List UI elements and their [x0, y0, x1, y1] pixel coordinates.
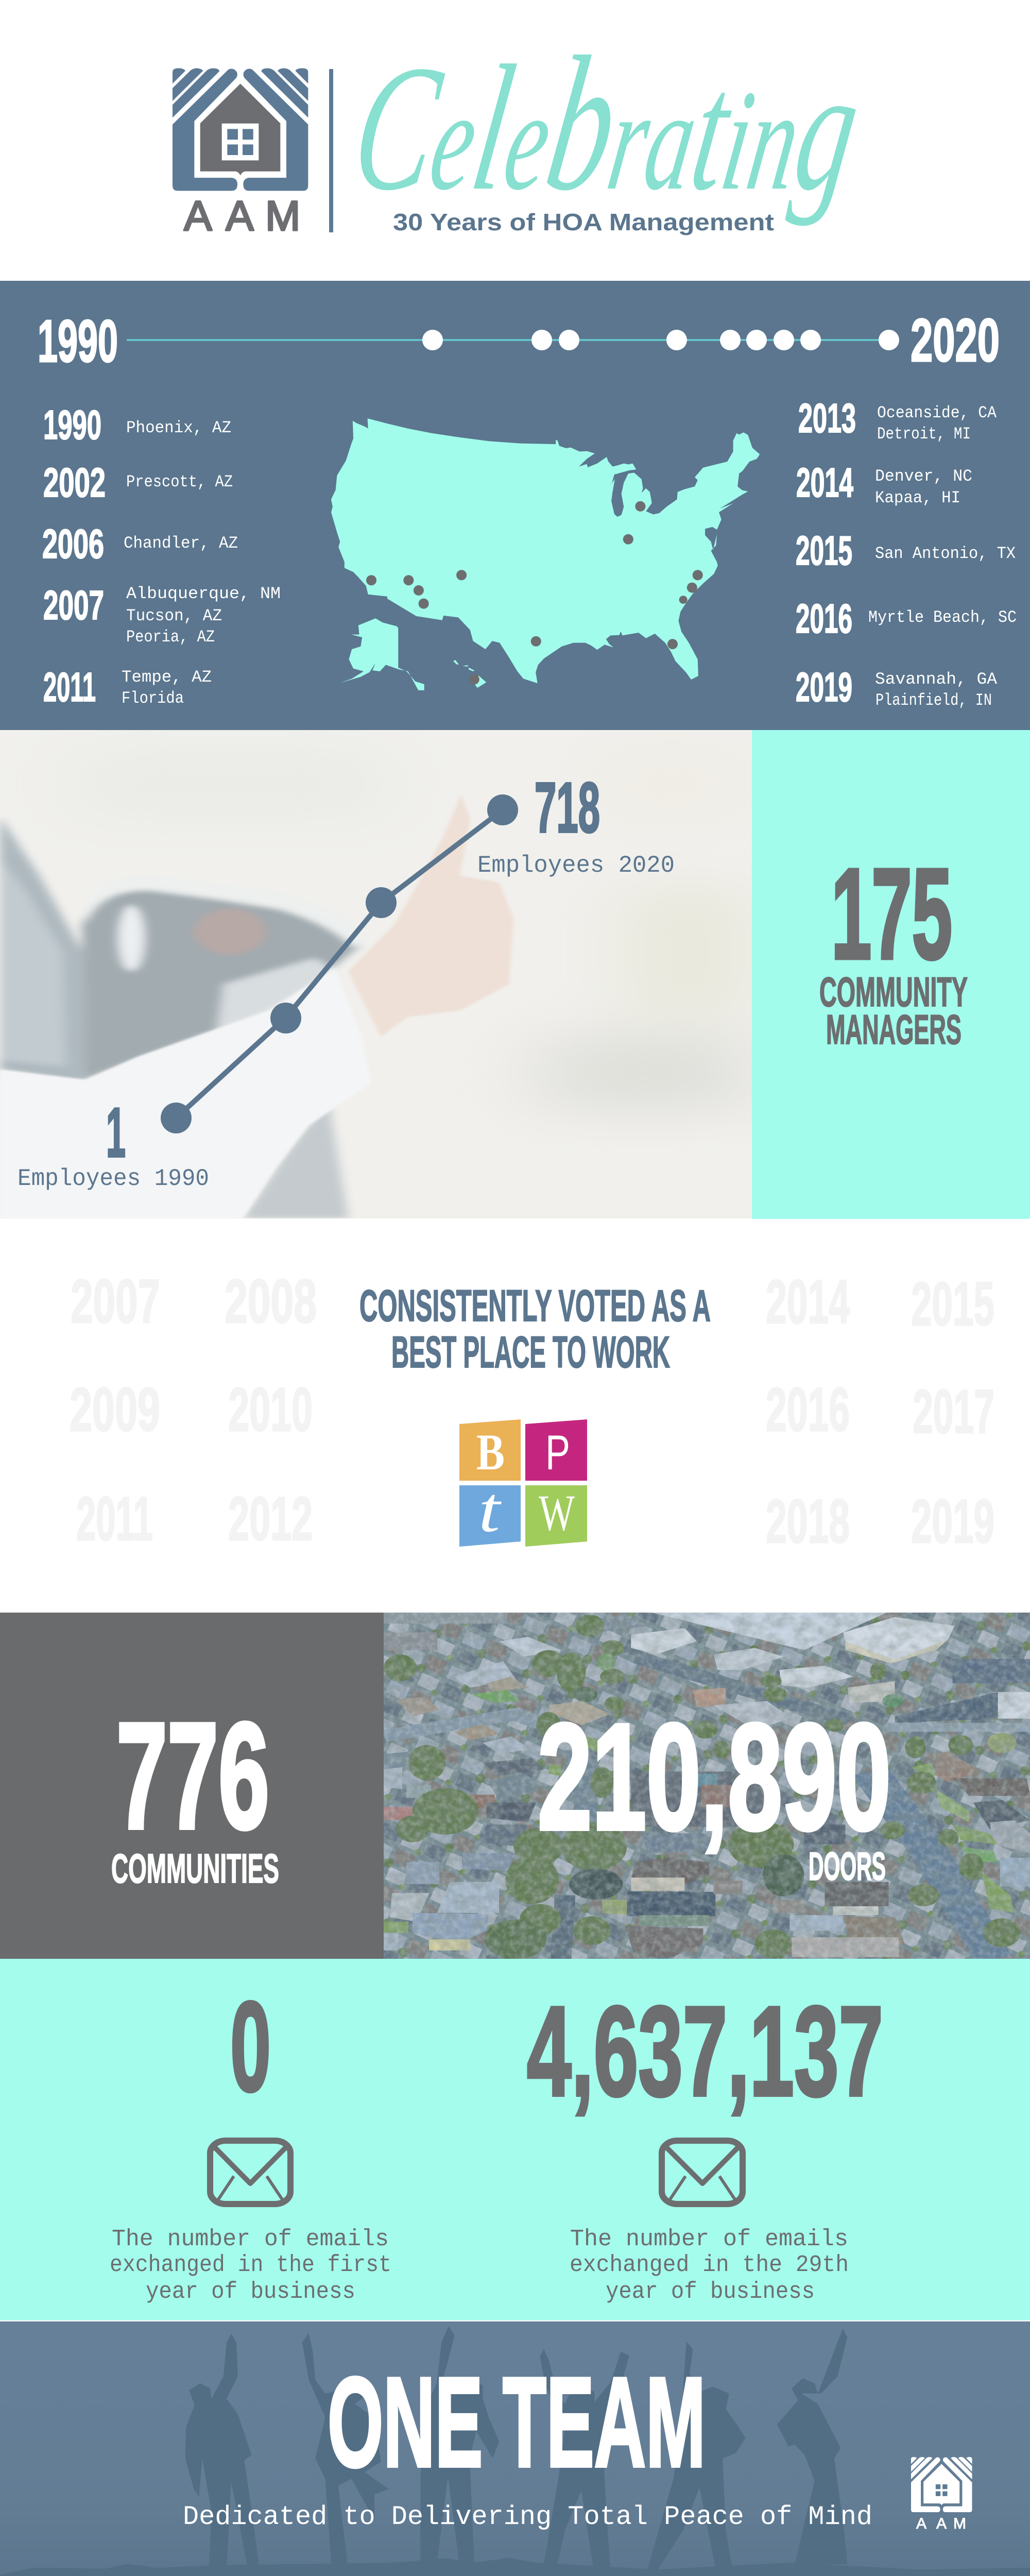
left location list: 1990: [43, 402, 101, 448]
heading: ONE TEAM: [328, 2350, 706, 2494]
timeline: 1990: [38, 308, 118, 375]
left location list: 2007: [43, 582, 104, 628]
ghost years: 2008: [225, 1267, 317, 1336]
caption: exchanged in the first: [110, 2252, 391, 2278]
icon: Best Place to Work logo: t: [478, 1475, 502, 1546]
panel: communities: 776: [116, 1692, 269, 1860]
stat: 1 employee 1990: Employees 1990: [18, 1165, 209, 1192]
stat: 0 emails: 0: [230, 1975, 271, 2118]
right location list: Detroit, MI: [877, 425, 971, 444]
panel: doors: [384, 1613, 1030, 1959]
left location list: 2002: [43, 460, 106, 505]
ghost years: 2018: [766, 1487, 850, 1556]
location dots: [366, 501, 703, 685]
roads: [384, 1657, 994, 1959]
left location list: Tempe, AZ: [122, 668, 212, 687]
icon: envelope: [662, 2141, 743, 2204]
right location list: [796, 395, 1017, 710]
stat: 1 employee 1990: [18, 1093, 209, 1192]
growth line chart: [161, 794, 518, 1133]
trees: [384, 1615, 1021, 1959]
caption: The number of emails: [112, 2226, 389, 2252]
right location list: 2013: [798, 395, 856, 441]
left location list: 2011: [43, 664, 96, 710]
ghost years: 2009: [70, 1375, 160, 1444]
icon: Best Place to Work logo: P: [545, 1426, 570, 1480]
ghost years: 2014: [766, 1267, 850, 1336]
right location list: Denver, NC: [875, 467, 972, 486]
icon: AAM house logo: [173, 68, 308, 191]
title script: Celebrating: [341, 16, 874, 230]
right location list: Kapaa, HI: [875, 488, 960, 507]
right location list: 2019: [796, 664, 852, 710]
right location list: Oceanside, CA: [877, 403, 997, 422]
left location list: [42, 402, 281, 710]
panel: communities: [0, 1613, 384, 1959]
heading: [359, 1281, 711, 1377]
right location list: 2016: [796, 596, 852, 641]
ghost years: 2016: [766, 1375, 850, 1444]
panel: communities: COMMUNITIES: [111, 1845, 279, 1891]
left location list: Albuquerque, NM: [126, 584, 281, 603]
icon: Best Place to Work logo: B: [476, 1423, 505, 1481]
panel: emails: [0, 1959, 1030, 2320]
ghost years: 2010: [228, 1375, 313, 1444]
panel: one team footer: [0, 2320, 1030, 2576]
left location list: Prescott, AZ: [126, 472, 233, 492]
timeline: [38, 307, 1000, 375]
stat: 718 employees 2020: 718: [535, 768, 600, 848]
ghost years: 2011: [76, 1484, 153, 1553]
left location list: 2006: [42, 521, 104, 567]
panel: community managers: [752, 730, 1030, 1219]
stat: 718 employees 2020: [477, 768, 675, 879]
caption: exchanged in the 29th: [570, 2252, 849, 2278]
left location list: Peoria, AZ: [126, 628, 215, 647]
roofs: [384, 1613, 1030, 1957]
header: [0, 0, 1030, 281]
panel: employees photo: [0, 730, 752, 1218]
right location list: San Antonio, TX: [875, 544, 1016, 563]
caption: year of business: [146, 2279, 355, 2305]
ghost years: 2012: [228, 1484, 313, 1553]
photo: aerial neighbourhood: [384, 1613, 1030, 1959]
photo: thumbs up from car window: [0, 730, 752, 1218]
heading: CONSISTENTLY VOTED AS A: [359, 1281, 711, 1331]
lawns: [384, 1690, 1015, 1933]
left location list: Chandler, AZ: [124, 534, 238, 553]
icon: AAM logo white: [911, 2457, 972, 2532]
logo wordmark: AAM: [184, 193, 300, 240]
icon: Best Place to Work logo: [459, 1419, 587, 1547]
divider: [329, 69, 333, 232]
icon: envelope: [210, 2141, 290, 2204]
panel: best place to work: [0, 1219, 1030, 1613]
ghost years: [70, 1267, 994, 1556]
stat: 718 employees 2020: Employees 2020: [477, 852, 675, 879]
left location list: Florida: [122, 689, 184, 708]
stat: 4,637,137 emails: [527, 1979, 883, 2305]
right location list: Plainfield, IN: [876, 691, 992, 710]
right location list: 2014: [796, 460, 853, 505]
right location list: Myrtle Beach, SC: [868, 608, 1017, 627]
caption: year of business: [606, 2279, 815, 2305]
panel: timeline and map: [0, 281, 1030, 730]
commercial buildings: [651, 1613, 1030, 1732]
right location list: Savannah, GA: [875, 670, 998, 689]
stat: 0 emails: [110, 1975, 391, 2305]
right location list: 2015: [796, 528, 852, 573]
tagline: Dedicated to Delivering Total Peace of Mind: [183, 2502, 872, 2532]
map of the United States: [331, 418, 760, 690]
stat: 1 employee 1990: 1: [106, 1093, 126, 1172]
heading: BEST PLACE TO WORK: [391, 1328, 670, 1377]
left location list: Phoenix, AZ: [126, 418, 231, 437]
left location list: Tucson, AZ: [126, 606, 222, 625]
ghost years: 2007: [71, 1267, 160, 1336]
caption: [110, 2226, 391, 2305]
silhouettes of team: [0, 2326, 1030, 2576]
label: doors: DOORS: [809, 1844, 886, 1889]
subtitle: 30 Years of HOA Management: [393, 209, 774, 235]
icon: AAM logo white: AAM: [916, 2515, 966, 2532]
caption: [570, 2226, 849, 2305]
icon: Best Place to Work logo: W: [539, 1484, 575, 1541]
caption: The number of emails: [570, 2226, 848, 2252]
